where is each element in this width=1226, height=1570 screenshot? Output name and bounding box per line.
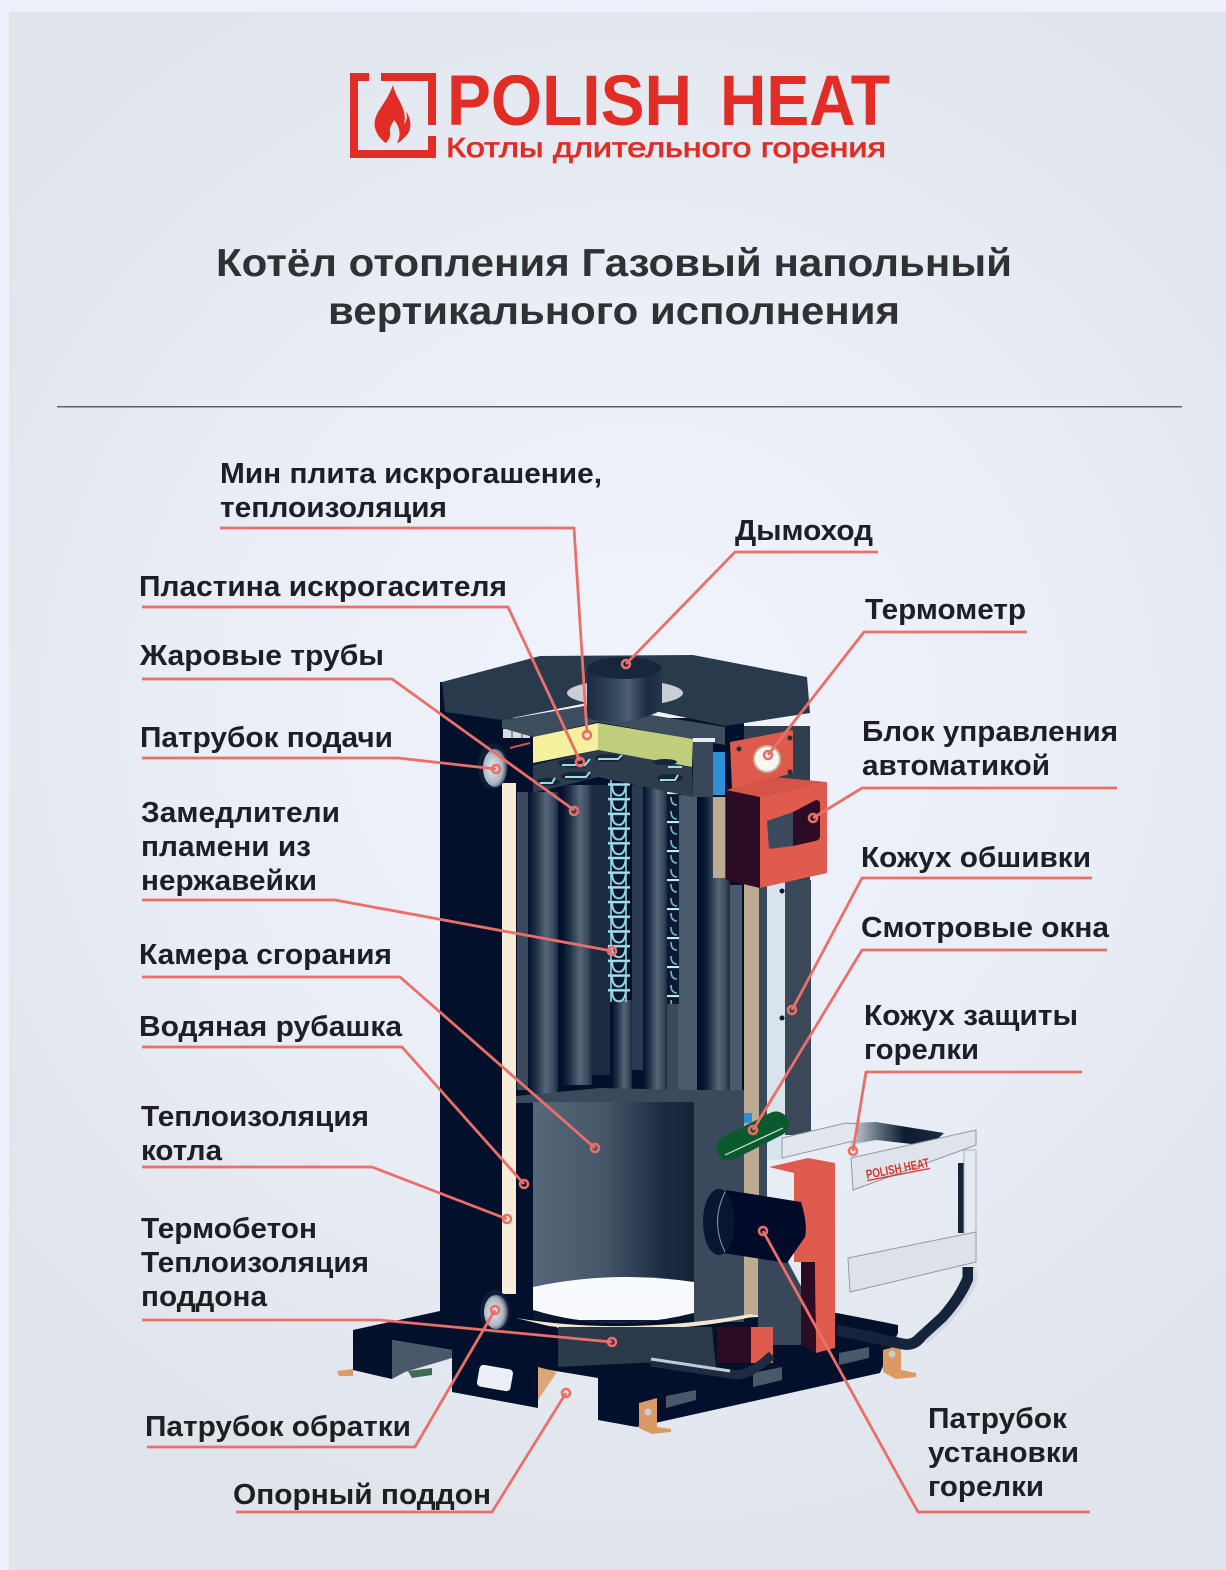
fitting feed and return	[478, 743, 510, 1334]
label: thermometer: Термометр	[865, 594, 1026, 626]
label: flame retarders: Замедлители	[141, 797, 340, 829]
burner guard cage	[782, 1122, 976, 1344]
title: вертикального исполнения	[328, 290, 900, 333]
burner guard cage: POLISH HEAT	[865, 1155, 930, 1182]
label: burner mount: горелки	[928, 1471, 1044, 1503]
label: thermal concrete	[141, 1213, 369, 1313]
label: boiler insulation: котла	[141, 1135, 223, 1167]
label: mineral plate: Мин плита искрогашение,	[220, 458, 602, 490]
orange mounting brackets	[337, 1345, 916, 1434]
top plate underside	[502, 705, 725, 745]
label: burner guard: горелки	[864, 1034, 979, 1066]
title	[216, 242, 1012, 333]
label: mineral plate: теплоизоляция	[220, 492, 447, 524]
control box	[726, 777, 827, 888]
label: thermal concrete: Теплоизоляция	[141, 1247, 369, 1279]
label: chimney: Дымоход	[735, 515, 873, 547]
flue ring	[567, 680, 683, 706]
feed pipe frame pieces	[503, 729, 530, 748]
insulation strip	[502, 783, 516, 1294]
boiler illustration	[337, 655, 976, 1434]
label: burner guard	[864, 1000, 1078, 1066]
top cover plate	[442, 655, 810, 726]
label: boiler insulation	[141, 1101, 369, 1167]
second flame retarder ladder	[667, 792, 679, 1004]
flue pipe	[587, 657, 662, 722]
lower rail	[651, 1355, 772, 1375]
boiler left wall	[440, 682, 502, 1325]
label: spark plate: Пластина искрогасителя	[139, 571, 507, 603]
blue and tan inner wall	[693, 738, 725, 878]
logo	[354, 62, 890, 163]
fire tubes	[517, 785, 742, 1100]
base frame left	[353, 1311, 898, 1427]
flame retarder ladder	[607, 780, 631, 1003]
boiler right wall	[725, 726, 811, 1345]
label: control unit: автоматикой	[862, 750, 1050, 782]
label: mineral plate	[220, 458, 602, 524]
red burner bracket	[769, 1158, 835, 1353]
label: fire tubes: Жаровые трубы	[139, 640, 384, 672]
label: flame retarders: пламени из	[141, 831, 311, 863]
label: burner mount	[928, 1403, 1079, 1503]
label: burner guard: Кожух защиты	[864, 1000, 1078, 1032]
label: return pipe: Патрубок обратки	[145, 1411, 411, 1443]
combustion chamber	[516, 1088, 744, 1323]
tank floor	[516, 1314, 773, 1368]
label: combustion chamber: Камера сгорания	[139, 939, 392, 971]
thermometer plate	[730, 730, 793, 790]
label: flame retarders: нержавейки	[141, 865, 317, 897]
label: thermal concrete: Термобетон	[141, 1213, 317, 1245]
label: casing: Кожух обшивки	[861, 842, 1091, 874]
label: boiler insulation: Теплоизоляция	[141, 1101, 369, 1133]
label: feed pipe: Патрубок подачи	[140, 722, 393, 754]
label: burner mount: установки	[928, 1437, 1079, 1469]
label: control unit: Блок управления	[862, 716, 1118, 748]
yellow mineral plate	[533, 723, 693, 767]
label: thermal concrete: поддона	[141, 1281, 268, 1313]
label: control unit	[862, 716, 1118, 782]
logo wordmark: HEAT	[720, 62, 890, 141]
title: Котёл отопления Газовый напольный	[216, 242, 1012, 285]
icon: logo frame with flame	[354, 77, 432, 154]
green sight window	[725, 1113, 783, 1155]
label: support pallet: Опорный поддон	[233, 1479, 491, 1511]
leader markers	[491, 660, 857, 1397]
label: sight windows: Смотровые окна	[861, 912, 1110, 944]
logo wordmark: POLISH	[447, 62, 692, 141]
tube sheet	[533, 750, 693, 797]
logo tagline: Котлы длительного горения	[446, 132, 886, 163]
interior background	[502, 718, 744, 1325]
label: burner mount: Патрубок	[928, 1403, 1068, 1435]
burner pipe	[703, 1189, 806, 1263]
label: water jacket: Водяная рубашка	[139, 1011, 403, 1043]
leader lines	[142, 528, 1117, 1512]
logo wordmark	[447, 62, 890, 141]
label: flame retarders	[141, 797, 340, 897]
